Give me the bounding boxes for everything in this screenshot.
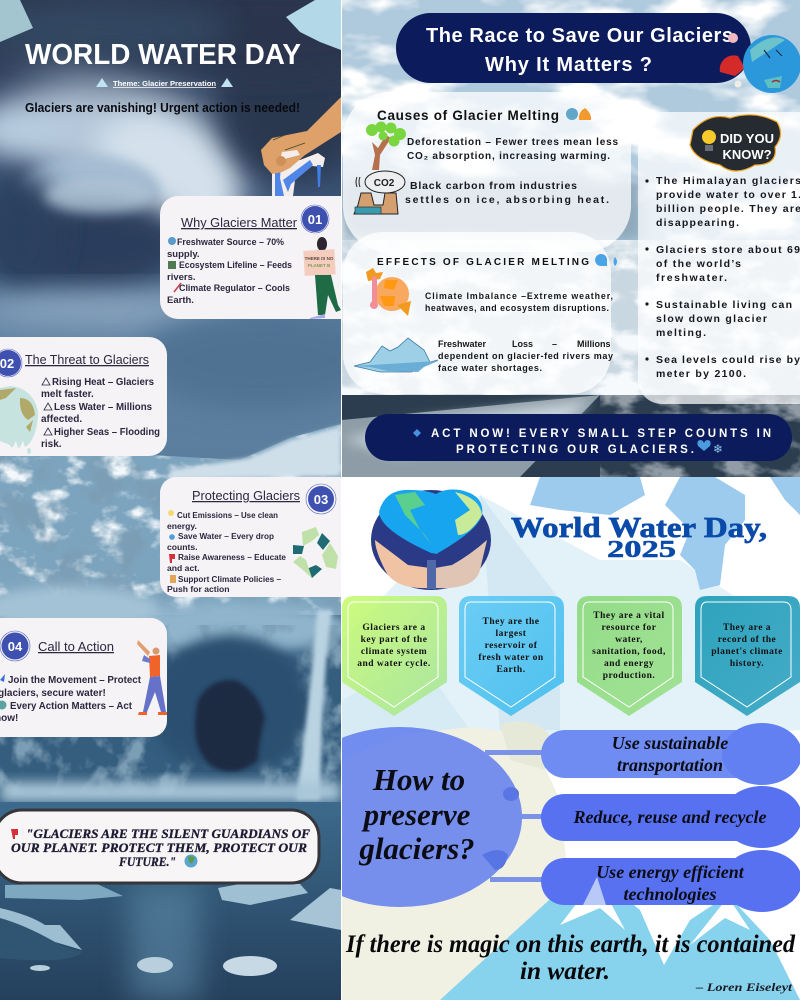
text: glacier facts: provide water to over 1. [656,189,800,201]
card: climate record: history. [730,659,764,669]
icon: hot earth with thermometer [366,268,411,316]
title: WORLD WATER DAY [25,39,301,71]
subtitle: theme: Theme: Glacier Preservation [113,79,216,88]
quote: Loren Eiseley: – Loren Eiseleyt [695,980,793,994]
card: vital resource: and energy [604,659,654,669]
text: climate imbalance [425,291,613,313]
card: climate system [342,596,447,716]
list 04 [0,674,142,724]
quote: Loren Eiseley: in water. [520,958,610,985]
panel: glacier preservation poster [0,0,341,1000]
list 01: Freshwater Source – 70% [177,237,285,248]
icon: tree [366,122,406,170]
callout: act now [365,414,792,461]
text: glacier facts: disappearing. [656,217,739,229]
branch: energy efficient technologies: Use energy efficient [596,862,745,882]
icon: sweating earth with fan [720,33,800,93]
callout: glacier quote: "GLACIERS ARE THE SILENT GUARDIANS OF [26,826,310,841]
list 03: energy. [167,521,197,531]
header pill [396,13,751,83]
list 02: melt faster. [41,389,94,400]
decoration: ice shards in the corners [0,0,341,50]
card: vital resource: resource for [602,623,657,633]
list 03: Save Water – Every drop [178,531,274,541]
text: deforestation: CO₂ absorption, increasing warming. [407,151,610,162]
text: glacier facts: melting. [656,327,706,339]
title: 2025 [607,537,676,563]
list 03: and act. [167,563,199,573]
callout: act now: PROTECTING OUR GLACIERS. [456,444,694,456]
icon: melting iceberg [354,338,438,372]
panel 02: the threat to glaciers [0,337,167,456]
list 03: Cut Emissions – Use clean [177,510,278,520]
panel: the race to save our glaciers [342,0,800,477]
card: freshwater reservoir: fresh water on [478,653,544,663]
list 01: Earth. [167,295,194,306]
heading 03: Protecting Glaciers [192,489,300,503]
text: glacier facts: freshwater. [656,272,727,284]
text: climate imbalance: heatwaves, and ecosystem disruptions. [425,303,609,313]
panel: causes of glacier melting [343,92,631,252]
text: black carbon [405,180,609,206]
header pill: The Race to Save Our Glaciers [426,25,733,47]
card: vital resource: They are a vital [593,611,665,621]
card: climate record: planet's climate [711,647,783,657]
badge 03: 03 [314,492,328,507]
icon: protester with sign [303,237,341,319]
card: vital resource [577,596,682,716]
badge 04 [0,631,30,661]
text: freshwater loss: Freshwater [438,339,487,349]
background: snowflakes, ice sheets and pale washes [342,477,800,1000]
text: black carbon: settles on ice, absorbing heat. [405,194,609,206]
title: World Water Day, [511,512,767,544]
text: freshwater loss: Millions [577,339,610,349]
panel 03: protecting glaciers [160,477,360,597]
illustration: polar bear [342,722,570,1000]
list 04: Join the Movement – Protect [8,675,142,686]
branch: sustainable transport: transportation [617,755,723,775]
icon: man with megaphone [137,640,167,715]
list 01: Climate Regulator – Cools [179,283,290,294]
card: freshwater reservoir: largest [496,629,527,639]
card: vital resource: water, [615,635,643,645]
badge 01: 01 [308,212,322,227]
list 02: affected. [41,414,82,425]
panel 01: why glaciers matter [160,196,360,319]
heading: effects: EFFECTS OF GLACIER MELTING [377,257,589,268]
heading 04: Call to Action [38,640,114,654]
text: glacier facts: slow down glacier [656,313,767,325]
diagram: how to preserve glaciers [278,723,800,912]
text: black carbon: Black carbon from industries [410,180,577,192]
text: freshwater loss: Loss [512,339,533,349]
card: freshwater reservoir: reservoir of [485,641,538,651]
card: climate system: key part of the [361,635,427,645]
card: freshwater reservoir [459,596,564,716]
heading 02: The Threat to Glaciers [25,352,149,367]
badge 02: 02 [0,356,14,371]
card: climate record [695,596,800,716]
quote: Loren Eiseley [345,931,795,994]
callout: act now: ACT NOW! EVERY SMALL STEP COUNTS IN [431,428,771,440]
icon: melting earth [0,386,38,454]
quote: Loren Eiseley: If there is magic on this earth, it is contained [345,931,795,958]
card: climate system: Glaciers are a [362,623,426,633]
hub: question: preserve [361,797,471,832]
panel: effects of glacier melting [343,232,617,394]
callout: act now: ❄ [713,442,723,456]
badge 03 [306,484,336,514]
icon: did you know badge [690,115,781,171]
list 03: Push for action [167,584,230,594]
heading: effects [378,254,617,266]
text: deforestation [407,137,618,162]
panel: did you know [638,112,800,404]
list 03: Support Climate Policies – [178,574,281,584]
hub: question: How to [372,762,465,797]
icon: did you know badge: DID YOU [720,131,774,146]
icon: did you know badge: KNOW? [722,147,772,162]
list 01 [167,237,292,306]
panel: world water day 2025 [278,477,800,1000]
list 04: glaciers, secure water! [0,688,106,699]
text: deforestation: Deforestation – Fewer trees mean less [407,137,618,148]
panel 04: call to action [0,618,167,737]
text: glacier facts: Sustainable living can [656,299,792,311]
subtitle: theme [96,78,233,88]
text: climate imbalance: Climate Imbalance –Extreme weather, [425,291,613,301]
card: climate system: climate system [361,647,427,657]
tagline: Glaciers are vanishing! Urgent action is needed! [25,100,300,115]
icon: factory with CO2: CO2 [374,178,395,189]
card: freshwater reservoir: Earth. [496,665,526,675]
text: freshwater loss: dependent on glacier-fed rivers may [438,351,613,361]
list 03: counts. [167,542,198,552]
branch: sustainable transport: Use sustainable [612,733,728,753]
branch: energy efficient technologies: technologies [624,884,716,904]
card: climate record: record of the [718,635,776,645]
text: glacier facts: Glaciers store about 69 [656,244,800,256]
list 02: Less Water – Millions [54,402,152,413]
card: climate system: and water cycle. [357,659,431,669]
badge 04: 04 [8,639,23,654]
hub: question: glaciers? [358,831,475,866]
list 02 [41,377,160,450]
illustration: earth heart held in hands [371,490,491,590]
branch: reduce reuse recycle [522,786,800,848]
heading: causes: Causes of Glacier Melting [377,108,559,123]
list 04: Every Action Matters – Act [10,701,133,712]
list 02: Rising Heat – Glaciers [52,377,154,388]
icon: recycle arrows [293,527,338,578]
icon: factory with CO2 [354,171,405,214]
badge 01 [301,205,329,233]
card: climate record: They are a [723,623,771,633]
icon: hand on dripping tap [261,97,341,196]
icon: protester with sign: PLANET B [308,263,331,268]
background: storm clouds, glacier, waterfall and icy lake [0,0,341,1000]
heading 01: Why Glaciers Matter [181,215,298,230]
callout: glacier quote: FUTURE." [118,854,176,869]
text: freshwater loss: face water shortages. [438,363,542,373]
branch: sustainable transport [485,723,800,785]
text: glacier facts: billion people. They are [656,203,800,215]
background: clouds and sea ice [342,0,800,477]
list 02: risk. [41,439,62,450]
list 01: rivers. [167,272,196,283]
title [511,512,767,563]
list 01: Ecosystem Lifeline – Feeds [179,260,292,271]
list 03: Raise Awareness – Educate [178,552,286,562]
text: glacier facts: Sea levels could rise by [656,354,800,366]
branch: reduce reuse recycle: Reduce, reuse and recycle [573,807,766,827]
callout: glacier quote [0,810,319,883]
text: freshwater loss: – [552,339,557,349]
list 02: Higher Seas – Flooding [54,427,160,438]
callout: glacier quote: OUR PLANET. PROTECT THEM, PROTECT OUR [11,840,307,855]
icon: protester with sign: THERE IS NO [305,256,334,261]
header pill: Why It Matters ? [485,54,652,76]
list 03 [167,510,286,594]
text: glacier facts [645,175,800,380]
badge 02 [0,349,22,377]
illustration: snowy mountains [440,875,800,1000]
hub: question [278,727,522,907]
list 01: supply. [167,249,200,260]
text: glacier facts: meter by 2100. [656,368,746,380]
branch: energy efficient technologies [490,850,800,912]
text: glacier facts: of the world’s [656,258,741,270]
card: vital resource: sanitation, food, [592,647,666,657]
text: freshwater loss [438,339,613,373]
card: vital resource: production. [603,671,655,681]
text: glacier facts: The Himalayan glaciers [656,175,800,187]
card: freshwater reservoir: They are the [482,617,540,627]
